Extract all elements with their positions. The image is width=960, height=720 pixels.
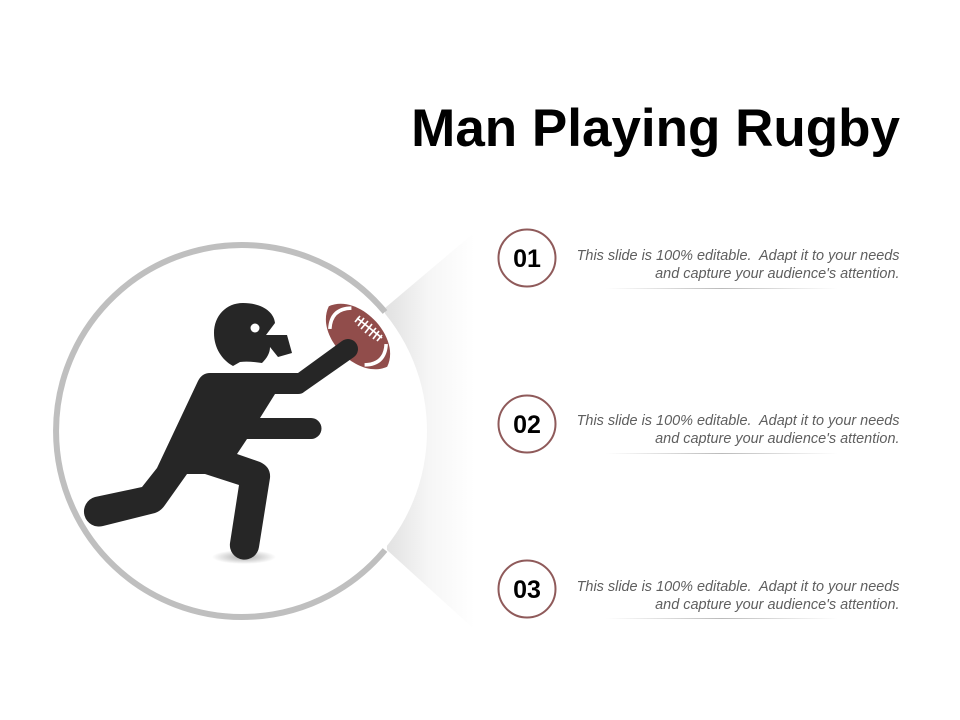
item 01 number badge	[498, 230, 556, 286]
item 01 text	[577, 248, 900, 282]
item 03 number badge: 03	[513, 576, 541, 604]
item 02 text: This slide is 100% editable. Adapt it to your needs	[577, 413, 900, 429]
title: Man Playing Rugby	[411, 99, 900, 158]
panel: grey ring arc	[56, 245, 385, 617]
item 03 text: and capture your audience's attention.	[655, 597, 900, 613]
icon: rugby ball	[312, 290, 404, 383]
item 01 text: and capture your audience's attention.	[655, 266, 900, 282]
item 02 number badge: 02	[513, 411, 541, 439]
icon: foot shadow	[212, 550, 276, 564]
item 01 text: This slide is 100% editable. Adapt it to your needs	[577, 248, 900, 264]
item 01 number badge: 01	[513, 245, 541, 273]
icon: player body	[84, 339, 358, 560]
panel: spotlight cone	[385, 232, 475, 630]
item 02 text: and capture your audience's attention.	[655, 431, 900, 447]
item 03 text: This slide is 100% editable. Adapt it to your needs	[577, 579, 900, 595]
item 03 number badge	[498, 560, 556, 618]
panel: white circle	[57, 246, 427, 616]
icon: helmet	[214, 303, 292, 366]
item 02 number badge	[498, 396, 556, 452]
item 03 text	[577, 579, 900, 613]
item 02 text	[577, 413, 900, 447]
